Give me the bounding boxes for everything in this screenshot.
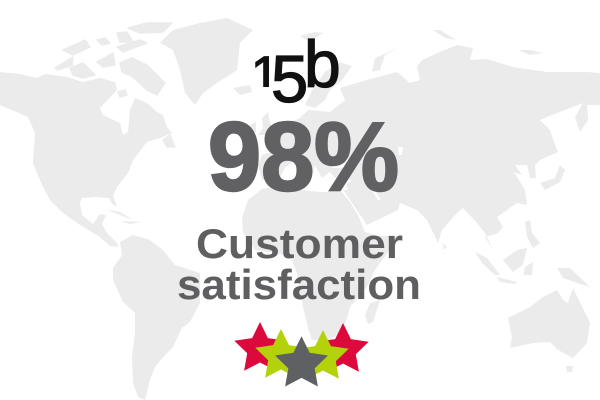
Northern islands xyxy=(300,30,543,72)
logo letter b: b xyxy=(304,27,341,101)
logo: 15b xyxy=(255,38,339,104)
Tasmania xyxy=(566,366,573,372)
Madagascar xyxy=(365,300,380,324)
inland seas xyxy=(320,147,403,200)
star: red right xyxy=(317,323,369,372)
label: Customer satisfaction xyxy=(177,220,421,308)
logo digit 1: 1 xyxy=(251,46,279,103)
Greenland xyxy=(160,18,253,105)
label line 2: satisfaction xyxy=(177,261,421,308)
North America xyxy=(0,72,172,247)
Australia xyxy=(508,288,590,358)
star: lime right xyxy=(297,330,349,379)
Great Britain and Ireland xyxy=(250,112,275,135)
Caribbean islands xyxy=(107,210,142,224)
star: red left xyxy=(234,322,286,371)
star: grey centre xyxy=(275,336,328,386)
logo digit 5: 5 xyxy=(271,42,308,117)
headline: 98%: 98% xyxy=(208,102,399,211)
five star rating xyxy=(234,322,369,386)
star: lime left xyxy=(255,329,307,378)
Southeast Asia islands xyxy=(442,220,590,287)
Iceland xyxy=(233,85,252,95)
South America xyxy=(113,235,200,400)
Eurasia xyxy=(258,45,600,250)
Africa xyxy=(242,186,398,340)
Scandinavia xyxy=(305,62,352,108)
Japan xyxy=(540,165,565,190)
label line 1: Customer xyxy=(196,220,403,267)
Arctic islands xyxy=(55,23,175,147)
